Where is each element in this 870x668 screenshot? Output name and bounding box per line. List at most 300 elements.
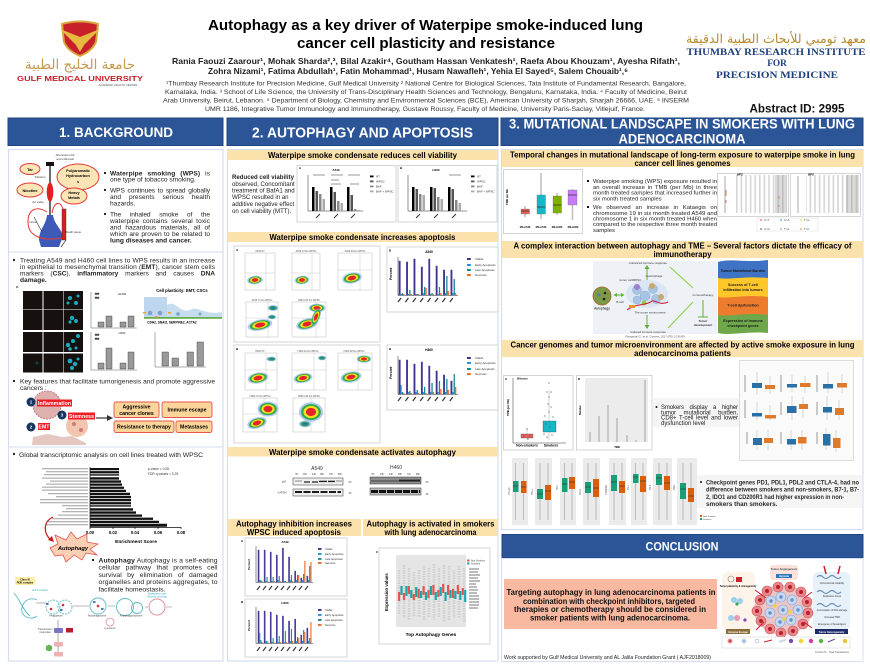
chart: flow cytometry A549: A549 72 hrs WPSC — [252, 299, 273, 302]
heading band: cell viability: Waterpipe smoke condensate reduces cell viability — [268, 150, 457, 160]
callout: conclusion statement — [504, 579, 717, 629]
title: Autophagy as a key driver of Waterpipe smoke-induced lung — [208, 18, 643, 34]
diagram: autophagy-TME interaction: enhanced immune response — [629, 261, 667, 265]
text block: key features: cancers : — [20, 385, 47, 392]
chart: western blots: 50 — [426, 481, 429, 484]
chart: TMB smokers vs non-smokers: TMB (per Mb) — [506, 399, 510, 416]
text block: checkpoint genes: smokers than smokers. — [706, 501, 778, 508]
diagram: immunotherapy efficacy factors — [718, 260, 768, 334]
footer: funding note: Work supported by Gulf Medical University and AL Jalila Foundation Grant ( AJF2018009) — [504, 655, 711, 661]
text block: smokers display: dysfunction level — [661, 421, 705, 427]
chart: apoptosis A549: A549 — [425, 250, 433, 254]
chart: kataegis rainfall plots: C>G — [764, 227, 770, 231]
chart: TMB boxplot: 3M-A549 — [520, 225, 531, 229]
text block: TMB and kataegis: Waterpipe smoking (WPS) exposure resulted in — [593, 179, 717, 185]
chart: A549 viability: BAF — [376, 184, 382, 188]
chart: flow cytometry A549: A549 120 hrs WPSC — [298, 299, 320, 302]
logo: Thumbay Research Institute: معهد ثومبي للأبحاث الطبية الدقيقة — [686, 31, 866, 47]
header — [17, 18, 866, 116]
heading band: smokers autophagy: with lung adenocarcinoma — [384, 527, 477, 537]
heading band: smokers autophagy — [363, 518, 498, 537]
chart: apoptosis A549: Percent — [389, 267, 393, 280]
heading band: autophagy and TME — [502, 240, 863, 259]
chart: marker bars: H460 — [119, 331, 126, 335]
text block: checkpoint genes: 2, IDO1 and CD200R1 had higher expression in non- — [706, 494, 844, 501]
chart: apoptosis H460 — [387, 345, 498, 410]
chart: mutation counts by stage: B — [578, 377, 581, 381]
heading band: autophagy and TME: A complex interaction between autophagy and TME – Several factors dictate the efficacy of — [514, 240, 852, 250]
diagram: immunotherapy efficacy factors: T-cell dysfunction — [727, 304, 759, 308]
icon: waterpipe with hazardous components: Tobacco — [34, 175, 46, 179]
chart: inhibition H460: Percent — [247, 620, 251, 631]
heading: mutational landscape — [501, 116, 863, 146]
diagram: autophagy-TME interaction: macrophage — [646, 274, 663, 278]
chart: western blots: 35 — [426, 493, 429, 496]
chart: flow cytometry A549: A549 24 hrs WPSC — [296, 250, 317, 253]
logo: Thumbay Research Institute: FOR — [767, 59, 787, 69]
diagram: tumor microenvironment and resistance: Replication stress — [823, 595, 842, 598]
text block: TMB and kataegis: samples — [593, 228, 615, 234]
diagram: autophagy pathway: Transmission — [38, 628, 53, 631]
heading band: autophagy inhibition: WPSC induced apoptosis — [247, 527, 341, 537]
text block: waterpipe smoking bullets: one type of tobacco smoking. — [110, 176, 196, 184]
chart: H460 viability: B — [400, 166, 403, 170]
chart: western blots: 96h — [416, 473, 421, 476]
heading: background — [8, 118, 223, 146]
diagram: immunotherapy efficacy factors: checkpoint genes — [727, 324, 759, 328]
chart: TMB boxplot: 6M-A549 — [536, 225, 547, 229]
callout: conclusion statement: smoker patients with lung adenocarcinoma. — [530, 612, 690, 622]
figure: immunofluorescence grid: C. — [16, 285, 19, 289]
chart: western blots: 72h — [407, 473, 412, 476]
diagram: hallmarks to aggressive clones: 2 — [30, 425, 33, 430]
diagram: hallmarks to aggressive clones — [26, 391, 212, 445]
diagram: autophagy pathway: Autophagosome — [88, 614, 107, 618]
chart: flow cytometry H460: H460 120 hrs WPSC — [298, 395, 320, 398]
chart: western blots: 72h — [329, 473, 334, 476]
chart: CSC marker bars — [155, 332, 206, 367]
diagram: tumor microenvironment and resistance: Tumor Heterogeneity — [819, 630, 845, 634]
chart: enrichment score: 0.06 — [154, 530, 163, 535]
chart: western blots: 35 — [349, 492, 352, 495]
affiliations: UMR 1186, Integrative Tumor Immunology and Immunotherapy, Gustave Roussy, Faculty of Medicine, University Paris-Saclay, Villejuif, France. — [205, 106, 645, 113]
abstract id: Abstract ID: 2995 — [750, 104, 845, 116]
chart: apoptosis A549: Late Apoptosis — [475, 268, 495, 272]
chart: flow cytometry H460: H460 NT — [255, 350, 265, 353]
chart: western blots: 16h — [303, 473, 308, 476]
heading: conclusion: CONCLUSION — [646, 542, 718, 554]
chart: H460 viability: H460 — [432, 168, 440, 172]
chart: TMB boxplot: TMB per Mb — [505, 189, 509, 205]
text block: reduced cell viability: on cell viability (MTT). — [232, 208, 292, 215]
text block: key features — [13, 378, 215, 392]
text block: treating cell lines: markers (CSC), inflammatory markers and causes DNA — [20, 270, 215, 278]
heading band: temporal changes — [502, 150, 863, 168]
diagram: autophagy-TME interaction: Autophagy — [594, 306, 610, 310]
icon: waterpipe with hazardous components: Tar — [27, 168, 33, 172]
chart: inhibition A549: Necrosis — [325, 561, 336, 565]
chart: TMB boxplot: 3M-H460 — [552, 225, 563, 229]
authors: Rania Faouzi Zaarour¹, Mohak Sharda²,³, Bilal Azakir⁴, Goutham Hassan Venkatesh¹, Raefa Abou Khouzam¹, Ayesha Rifath¹, — [172, 56, 680, 66]
logo: Gulf Medical University: جامعة الخليج الطبية — [25, 57, 135, 73]
affiliations — [163, 80, 689, 113]
logo: Thumbay Research Institute — [686, 31, 866, 81]
chart: inhibition A549: Percent — [247, 559, 251, 570]
heading band: temporal changes: cancer cell lines genomes — [634, 158, 731, 168]
chart: flow cytometry H460: H460 24 hrs WPSC — [298, 350, 319, 353]
diagram: immunotherapy efficacy factors: Expression of immune — [723, 319, 763, 323]
text block: TMB and kataegis: six month treated samples — [593, 196, 662, 202]
text block: waterpipe smoking bullets: lung diseases and cancer. — [110, 238, 192, 244]
diagram: hallmarks to aggressive clones: EMT — [39, 424, 50, 430]
text block: waterpipe smoking bullets: WPS continues to spread globally — [110, 188, 211, 194]
chart: western blots: 16h — [380, 473, 385, 476]
text block: autophagy description: survival by elimination of damaged — [98, 572, 218, 579]
chart: enrichment score: FDR q-values < 0.25 — [148, 472, 178, 476]
callout: conclusion statement: therapies or chemotherapy should be considered in — [514, 604, 706, 614]
diagram: tumor microenvironment and resistance: Limovin N. · Sina Transactions — [815, 651, 850, 654]
chart: inhibition A549: A549 — [281, 540, 289, 544]
chart: kataegis rainfall plots: T>A — [784, 227, 789, 231]
diagram: autophagy-TME interaction: The tumor environment — [634, 310, 666, 314]
text block: reduced cell viability: additive negative effect — [232, 201, 295, 208]
diagram: autophagy pathway: PI3K complex — [17, 582, 34, 585]
diagram: autophagy pathway: Class III — [20, 578, 30, 582]
chart: inhibition A549: A — [241, 539, 244, 543]
panel 3: mutational landscape — [501, 116, 863, 530]
chart: apoptosis A549: Viable — [475, 257, 484, 261]
chart: western blots: 96h — [338, 473, 343, 476]
chart: TMB smokers vs non-smokers — [504, 376, 573, 450]
logo: Gulf Medical University: GULF MEDICAL UNIVERSITY — [17, 74, 143, 83]
chart: checkpoint gene boxplots: B7-2 — [649, 484, 652, 490]
icon: waterpipe with hazardous components: Polyaromatic — [66, 169, 90, 173]
text block: key features: Key features that facilitate tumorigenesis and promote aggressive — [20, 378, 215, 386]
diagram: autophagy pathway: molecules — [39, 631, 51, 634]
chart: H460 viability: NT — [477, 174, 481, 178]
panel 2: autophagy and apoptosis — [227, 118, 498, 661]
diagram: hallmarks to aggressive clones: Metastases — [180, 424, 208, 430]
text block: TMB and kataegis: month treated samples that increased further in — [593, 190, 717, 196]
chart: autophagy gene expression boxplots: C — [376, 550, 379, 554]
diagram: hallmarks to aggressive clones: cancer clones — [119, 411, 154, 417]
text block: waterpipe smoking bullets — [104, 170, 211, 244]
panel frame — [502, 150, 863, 530]
chart: flow cytometry H460: B — [236, 347, 239, 351]
icon: waterpipe with hazardous components: Aluminium foil — [56, 153, 75, 157]
text block: treating cell lines: Treating A549 and H460 cell lines to WPS results in an increase — [20, 258, 215, 264]
title: cancer cell plasticity and resistance — [297, 36, 555, 52]
chart: western blots: 24h — [389, 473, 394, 476]
chart: enrichment score: p-value < 0.05 — [148, 467, 169, 471]
callout: autophagy burst: Autophagy — [57, 546, 89, 552]
chart: autophagy gene expression boxplots: Smokers — [471, 562, 481, 566]
chart: apoptosis A549: B — [389, 248, 392, 252]
chart: enrichment score: 0.00 — [86, 530, 95, 535]
icon: waterpipe with hazardous components: Nicotine — [23, 189, 37, 193]
chart: western blots: p62 — [282, 480, 287, 484]
chart: checkpoint gene boxplots: CTLA4 — [508, 487, 511, 495]
chart: autophagy gene expression boxplots — [376, 548, 490, 644]
text block: autophagy description: organelles and proteins aggregates, to — [98, 579, 218, 586]
diagram: autophagy-TME interaction: development — [694, 323, 712, 327]
icon: waterpipe with hazardous components: s — [77, 180, 79, 184]
chart: checkpoint gene boxplots — [508, 458, 717, 525]
chart: checkpoint gene boxplots: PDL1 — [531, 488, 534, 495]
chart: immune signature boxplots — [740, 360, 854, 460]
panel 1: background — [8, 118, 223, 661]
chart: autophagy gene expression boxplots: Non Smokers — [471, 560, 486, 562]
affiliations: Arab University, Beirut, Lebanon. ⁵ Department of Biology, Chemistry and Environmental Sciences (BCE), American University of Sharjah, Sharjah 26666, UAE. ⁶ INSERM — [163, 98, 689, 104]
heading: mutational landscape: ADENOCARCINOMA — [618, 132, 746, 146]
chart: inhibition H460: Viable — [325, 608, 333, 612]
diagram: tumor microenvironment and resistance: Immune Escape — [728, 630, 748, 634]
chart: western blots: GAPDH — [278, 492, 287, 494]
chart: enrichment score: 0.08 — [177, 530, 186, 535]
chart: H460 viability: BAF — [477, 184, 483, 188]
diagram: cell plasticity: Cell plasticity: EMT, CSCs — [156, 288, 208, 293]
chart: apoptosis A549: Early Apoptosis — [475, 263, 496, 267]
chart: enrichment score: 0.04 — [131, 530, 140, 535]
chart: enrichment score: Enrichment Score — [115, 539, 157, 545]
affiliations: Karnataka, India. ³ School of Life Science, the University of Trans-Disciplinary Health Sciences and Technology, Bengaluru, Karnataka, India. ⁴ Faculty of Medicine, Beirut — [165, 89, 687, 96]
diagram: cell plasticity: CDH2, SNAI2, SERPINE2, ACTA2 — [147, 320, 197, 324]
logo: Thumbay Research Institute: PRECISION MEDICINE — [716, 71, 838, 81]
panel frame — [228, 150, 498, 661]
chart: TMB smokers vs non-smokers: Smokers — [544, 444, 558, 448]
callout: conclusion statement: Targeting autophagy in lung adenocarcinoma patients in — [506, 587, 716, 597]
chart: apoptosis H460: Percent — [389, 366, 393, 379]
text block: waterpipe smoking bullets: and presents serious health — [110, 194, 210, 201]
text block: TMB and kataegis: chromosome 19 in six month treated A549 and — [593, 211, 717, 217]
diagram: hallmarks to aggressive clones: Immune escape — [168, 408, 207, 414]
chart: autophagy gene expression boxplots: Expression values — [384, 573, 389, 611]
text block: TMB and kataegis — [587, 179, 718, 234]
diagram: autophagy-TME interaction: immunotherapy — [693, 293, 714, 297]
chart: kataegis rainfall plots: WPS — [808, 172, 814, 176]
diagram: tumor microenvironment and resistance: Emergence of Neoantigens — [818, 623, 847, 626]
authors: Zohra Nizami¹, Fatima Abdullah¹, Fatin Mohammad¹, Husam Nawafleh¹, Yehia El Sayed⁵, Salem Chouaib¹,⁶ — [208, 66, 628, 76]
heading band: autophagy inhibition: Autophagy inhibition increases — [236, 518, 352, 528]
diagram: hallmarks to aggressive clones: 3 — [61, 413, 64, 418]
text block: TMB and kataegis: compared to the respective three month treated — [593, 222, 717, 228]
diagram: cell plasticity — [143, 288, 222, 324]
icon: waterpipe with hazardous components: Mouth piece — [65, 230, 82, 234]
text block: waterpipe smoking bullets: which are proven to be related to — [109, 231, 210, 238]
callout: conclusion statement: combination with checkpoint inhibitors, targeted — [523, 596, 695, 606]
title — [208, 18, 643, 52]
chart: apoptosis H460: H460 — [425, 348, 433, 352]
diagram: tumor microenvironment and resistance: Chromosomal instability — [820, 582, 845, 585]
text block: waterpipe smoking bullets: The inhaled smoke of the — [110, 212, 210, 218]
heading band: activates autophagy: Waterpipe smoke condensate activates autophagy — [269, 447, 456, 457]
chart: western blots — [278, 465, 429, 496]
chart: marker bars — [91, 292, 137, 370]
text block: reduced cell viability: WPSC resulted in an — [232, 194, 289, 201]
chart: enrichment score — [40, 467, 186, 545]
diagram: hallmarks to aggressive clones: Resistance to therapy — [117, 424, 171, 430]
chart: inhibition H460 — [241, 599, 347, 657]
diagram: autophagy pathway: Autophagolysosome — [120, 614, 143, 618]
chart: A549 viability — [297, 166, 396, 222]
chart: A549 viability: BAF + WPSC — [376, 190, 394, 194]
diagram: autophagy-TME interaction: Rangamal G., et al. Cancers, 2017 (PD) 12:56-89 — [625, 334, 685, 338]
panel: conclusion — [502, 534, 863, 662]
text block: autophagy description: cellular pathway that promotes cell — [98, 565, 218, 572]
chart: apoptosis H460: Early Apoptosis — [475, 361, 496, 365]
diagram: tumor microenvironment and resistance: Increased TMB — [824, 616, 840, 619]
text block: smokers display: CD8+ T-cell level and lower — [661, 416, 738, 422]
chart: marker bars: H1299 — [118, 292, 127, 296]
text block: reduced cell viability: treatment of BafA1 and — [232, 188, 295, 194]
diagram: hallmarks to aggressive clones: 1 — [30, 400, 33, 405]
text block: waterpipe smoking bullets: Waterpipe smoking (WPS) is — [110, 170, 211, 178]
text block: treating cell lines — [13, 258, 216, 284]
chart: flow cytometry A549: A549 NT — [255, 250, 265, 253]
heading band: smokers autophagy: Autophagy is activated in smokers — [366, 518, 495, 528]
text block: TMB and kataegis: an overall increase in TMB (per Mb) in three — [593, 185, 718, 191]
chart: western blots: 48h — [320, 473, 325, 476]
diagram: autophagy pathway — [14, 577, 172, 656]
text block: smokers display: Smokers display a higher — [661, 405, 738, 411]
text block: checkpoint genes — [697, 475, 862, 508]
diagram: autophagy-TME interaction: MDSC — [633, 278, 642, 282]
icon: waterpipe with hazardous components: Hose — [29, 220, 37, 224]
text block: autophagy description — [92, 558, 218, 594]
text block: reduced cell viability — [232, 174, 295, 215]
heading: background: 1. BACKGROUND — [59, 125, 173, 140]
chart: checkpoint gene boxplots: PD1 — [556, 485, 559, 490]
text block: autophagy description: Autophagy Autophagy is a self-eating — [98, 558, 218, 564]
heading band: cancer genomes — [502, 340, 863, 358]
logo: Gulf Medical University: ACADEMIC HEALTH CENTER — [99, 83, 137, 87]
chart: enrichment score: 0.02 — [109, 530, 118, 535]
heading: mutational landscape: 3. MUTATIONAL LANDSCAPE IN SMOKERS WITH LUNG — [509, 116, 855, 132]
chart: H460 viability — [398, 166, 497, 222]
diagram: hallmarks to aggressive clones: Inflammation — [38, 401, 71, 407]
text block: smokers display — [653, 398, 740, 427]
chart: flow cytometry H460 — [234, 345, 380, 443]
chart: flow cytometry A549 — [234, 246, 380, 342]
chart: inhibition H460: H460 — [281, 601, 289, 605]
chart: flow cytometry A549: A — [236, 248, 239, 252]
chart: apoptosis H460: Viable — [475, 356, 484, 360]
chart: western blots: NT — [295, 473, 299, 476]
chart: A549 viability: A — [299, 166, 302, 170]
icon: waterpipe with hazardous components: Heavy — [68, 191, 80, 195]
chart: inhibition A549: Viable — [325, 547, 333, 551]
chart: A549 viability: A549 — [332, 168, 340, 172]
chart: flow cytometry H460: H460 72 hrs WPSC — [250, 395, 271, 398]
chart: mutation counts by stage: TMB — [614, 445, 620, 449]
diagram: autophagy pathway: ULK1 complex — [32, 589, 49, 592]
chart: H460 viability: BAF + WPSC — [477, 190, 495, 194]
figure: immunofluorescence grid — [16, 285, 83, 372]
heading: conclusion — [502, 534, 863, 558]
diagram: autophagy-TME interaction: B cell — [616, 300, 624, 304]
panel frame — [502, 558, 863, 662]
chart: autophagy gene expression boxplots: Top Autophagy Genes — [406, 632, 457, 638]
icon: waterpipe with hazardous components: Metals — [68, 196, 80, 200]
chart: inhibition H460: Late Apoptosis — [325, 618, 343, 622]
text block: treating cell lines: damage. — [20, 277, 47, 284]
heading band: cancer genomes: adenocarcinoma patients — [634, 348, 731, 358]
icon: waterpipe with hazardous components — [17, 153, 99, 247]
text block: waterpipe smoking bullets: and hazardous materials, all of — [110, 224, 210, 232]
diagram: immunotherapy efficacy factors: Success of T-cell — [728, 283, 758, 287]
chart: checkpoint gene boxplots: Non Smokers — [703, 515, 717, 518]
diagram: tumor microenvironment and resistance: Accumulation of DNA damage — [817, 609, 848, 612]
chart: kataegis rainfall plots: WPS — [737, 172, 743, 176]
logo: Gulf Medical University — [17, 22, 143, 87]
chart: flow cytometry H460: H460 48 hrs WPSC — [344, 350, 365, 353]
chart: inhibition H460: B — [241, 600, 244, 604]
text block: reduced cell viability: observed, Concomitant — [232, 181, 295, 188]
chart: apoptosis H460: B — [389, 347, 392, 351]
heading: autophagy and apoptosis: 2. AUTOPHAGY AND APOPTOSIS — [252, 126, 473, 142]
text block: TMB and kataegis: We observed an increase in Kataegis on — [593, 205, 717, 211]
diagram: tumor microenvironment and resistance: Tumor plasticity & clonogenicity — [720, 585, 757, 588]
chart: TMB smokers vs non-smokers: Wilcoxon — [517, 378, 528, 380]
diagram: autophagy pathway: Degradation and — [148, 592, 167, 596]
chart: kataegis rainfall plots: T>C — [804, 227, 809, 231]
logo: Thumbay Research Institute: THUMBAY RESEARCH INSTITUTE — [686, 48, 866, 58]
chart: apoptosis H460: Late Apoptosis — [475, 367, 495, 371]
chart: checkpoint gene boxplots: Smokers — [703, 518, 713, 521]
chart: A549 viability: NT — [376, 174, 380, 178]
chart: checkpoint gene boxplots: B7-1 — [627, 484, 630, 490]
icon: waterpipe with hazardous components: and charcoal — [56, 157, 74, 161]
callout: autophagy burst — [45, 517, 98, 562]
chart: TMB boxplot: 6M-H460 — [568, 225, 579, 229]
chart: apoptosis H460: Necrosis — [475, 372, 487, 376]
authors — [172, 56, 680, 76]
text block: autophagy description: facilitate homeostasis. — [98, 586, 165, 594]
panel frame — [8, 150, 223, 661]
chart: inhibition A549: Late Apoptosis — [325, 557, 343, 561]
chart: western blots: NT — [371, 473, 375, 476]
chart: checkpoint gene boxplots: IDO1 — [673, 484, 676, 490]
chart: inhibition H460: Necrosis — [325, 623, 336, 627]
chart: kataegis rainfall plots — [718, 172, 860, 231]
icon: waterpipe with hazardous components: Air valve — [32, 200, 44, 204]
chart: kataegis rainfall plots: C>A — [784, 218, 790, 222]
text block: TMB and kataegis: chromosome 1 in six month treated H460 when — [593, 216, 717, 222]
heading band: autophagy and TME: immunotherapy — [654, 249, 712, 259]
text block: treating cell lines: in epithelial to mesenchymal transition (EMT), cancer stem cells — [20, 264, 216, 271]
diagram: autophagy-TME interaction: Tumor — [698, 319, 708, 323]
diagram: tumor microenvironment and resistance: Tumor Angiogenesis — [771, 567, 798, 571]
icon: waterpipe with hazardous components: Hydrocarbon — [66, 174, 90, 178]
text block: waterpipe smoking bullets: waterpipe contains several toxic — [109, 218, 211, 225]
diagram: tumor microenvironment and resistance — [720, 565, 850, 654]
chart: mutation counts by stage: Number — [578, 405, 582, 415]
text block: smokers display: tumor mutational burden, — [661, 410, 738, 416]
chart: flow cytometry A549: A549 48 hrs WPSC — [345, 250, 366, 253]
chart: mutation counts by stage — [576, 376, 652, 450]
chart: inhibition A549: Early Apoptosis — [325, 552, 344, 556]
affiliations: ¹Thumbay Research Institute for Precision Medicine, Gulf Medical University ² National Centre for Biological Sciences, Tata Institute of Fundamental Research, Bangalore, — [166, 80, 686, 88]
chart: TMB smokers vs non-smokers: A — [505, 377, 508, 381]
chart: western blots: 50 — [349, 481, 352, 484]
chart: apoptosis A549 — [387, 247, 498, 312]
text block: reduced cell viability: Reduced cell viability — [232, 174, 295, 181]
chart: A549 viability: WPSC — [376, 180, 385, 184]
chart: kataegis rainfall plots: C>T — [764, 218, 770, 222]
chart: kataegis rainfall plots: T>G — [804, 218, 810, 222]
diagram: tumor microenvironment and resistance: Hypoxia — [779, 575, 789, 578]
diagram: autophagy-TME interaction — [593, 261, 717, 338]
